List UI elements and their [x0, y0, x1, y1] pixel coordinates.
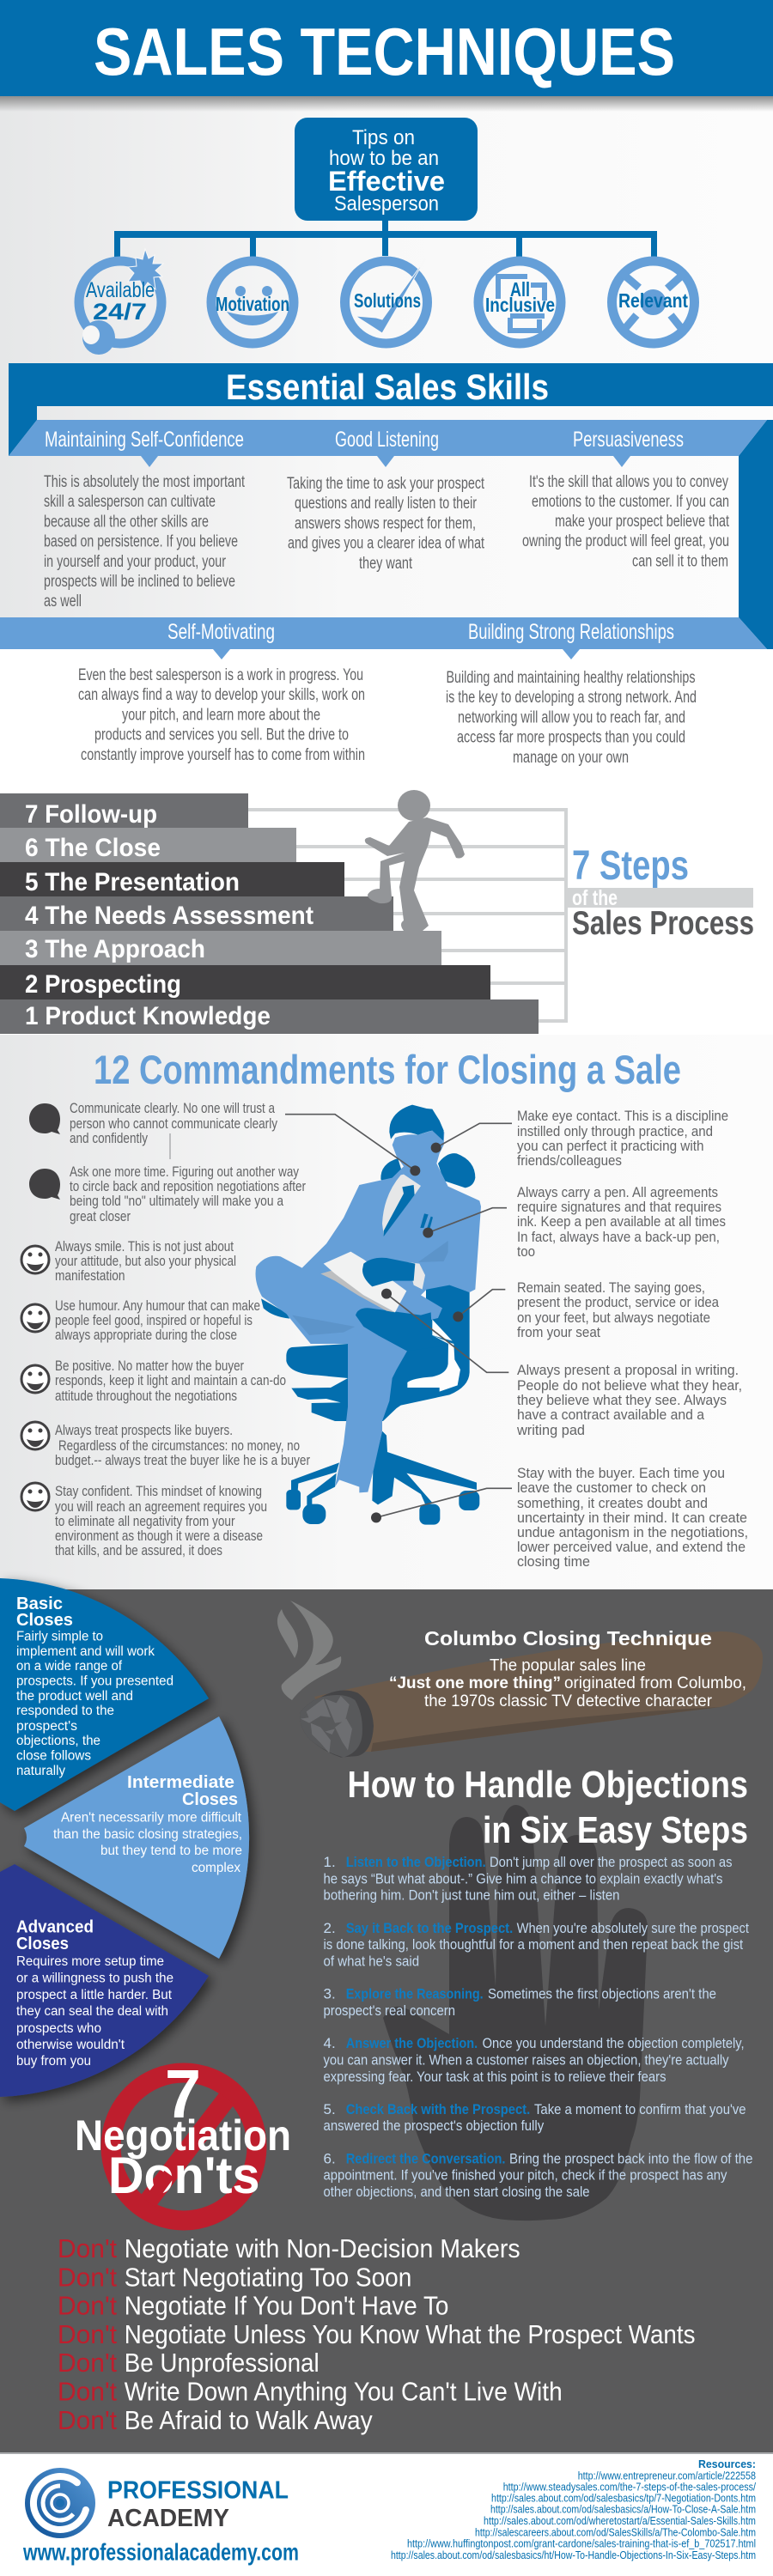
step 3: [0, 931, 441, 965]
step 2: 2.: [323, 1920, 336, 1936]
resources list: Resources:: [698, 2458, 756, 2470]
text: maintaining self-confidence: This is absolutely the most important: [44, 473, 246, 491]
icon: motivation: Motivation: [216, 293, 289, 315]
step 6: appointment. If you've finished your pitch, check if the prospect has any: [323, 2167, 727, 2184]
text: good listening: and gives you a clearer idea of what: [288, 534, 485, 553]
icon: smiley 3: [21, 1365, 49, 1393]
text: stay with the buyer: uncertainty in their mind. It can create: [517, 1510, 747, 1526]
step 1: 1.: [323, 1854, 336, 1870]
text: stay with the buyer: [517, 1466, 748, 1570]
text: communicate clearly: [70, 1101, 278, 1146]
shirt: [382, 1175, 421, 1235]
icon: relevant: Relevant: [618, 289, 688, 312]
step 4: 4.: [323, 2035, 336, 2051]
tips box: how to be an: [329, 147, 439, 170]
pie: advanced closes: Requires more setup time: [16, 1954, 164, 1969]
text: ask one more time: to circle back and reposition negotiations after: [70, 1179, 306, 1194]
text: always smile: Always smile. This is not just about: [55, 1239, 234, 1255]
text: always smile: [55, 1239, 236, 1284]
text: treat prospects like buyers: budget.-- always treat the buyer like he is a buyer: [55, 1453, 310, 1468]
callout: columbo closing technique: [389, 1627, 746, 1710]
text: be positive: [55, 1358, 286, 1404]
don't 6: Don't: [58, 2377, 118, 2406]
text: good listening: answers shows respect for them,: [295, 515, 476, 532]
text: communicate clearly: and confidently: [70, 1131, 149, 1146]
text: maintaining self-confidence: skill a salesperson can cultivate: [44, 493, 216, 511]
text: stay confident: that kills, and be assured, it does: [55, 1543, 222, 1558]
text: always carry a pen: ink. Keep a pen available at all times: [517, 1214, 726, 1230]
icon: all inclusive: [478, 261, 561, 343]
callout: columbo closing technique: originated from Columbo,: [564, 1674, 746, 1692]
callout: columbo closing technique: the 1970s classic TV detective character: [424, 1692, 713, 1710]
step 1: Don't jump all over the prospect as soon as: [490, 1854, 732, 1870]
pie: intermediate closes: Closes: [182, 1790, 238, 1809]
logo wordmark: ACADEMY: [107, 2505, 229, 2532]
step 5: answered the prospect's objection fully: [323, 2117, 545, 2134]
chair cut-out: [407, 1335, 460, 1392]
chair base: [286, 1431, 479, 1525]
pie: basic closes: Closes: [16, 1611, 73, 1630]
pie: basic closes: responded to the: [16, 1704, 114, 1718]
logo wordmark: www.professionalacademy.com: [22, 2539, 299, 2566]
skills frame and heading: [9, 363, 773, 649]
text: maintaining self-confidence: in yourself and your product, your: [44, 553, 226, 571]
icon and heading: 7 negotiation don'ts: [75, 2056, 291, 2221]
step 3: 3.: [323, 1985, 336, 2002]
don't 7: Be Afraid to Walk Away: [125, 2406, 373, 2435]
text: maintaining self-confidence: based on persistence. If you believe: [44, 532, 238, 551]
text: building strong relationships: networking will allow you to reach far, and: [458, 709, 685, 726]
step 3: 3 The Approach: [25, 935, 205, 963]
callout: columbo closing technique: “Just one more thing”: [389, 1674, 561, 1692]
step 4: expressing fear. Your task at this point is to relieve their fears: [323, 2069, 666, 2085]
skills header band row 2: [0, 617, 767, 659]
text: ask one more time: Ask one more time. Figuring out another way: [70, 1164, 300, 1180]
text: use humour: always appropriate during the close: [55, 1327, 237, 1343]
step 6: [323, 2150, 752, 2200]
text: make eye contact: friends/colleagues: [517, 1153, 622, 1169]
text: stay with the buyer: lower perceived value, and extend the: [517, 1540, 746, 1555]
pie: advanced closes: they can seal the deal with: [16, 2004, 168, 2019]
text: communicate clearly: person who cannot communicate clearly: [70, 1116, 278, 1132]
pie: basic closes: on a wide range of: [16, 1659, 123, 1674]
step 1: [323, 1854, 732, 1904]
text: stay with the buyer: undue antagonism in the negotiations,: [517, 1525, 748, 1540]
pie: intermediate closes: than the basic closing strategies,: [53, 1827, 242, 1842]
pen: [420, 1213, 433, 1228]
icon: smiley 4: [21, 1422, 49, 1449]
don't 1: Don't: [58, 2234, 118, 2263]
7 steps connector lines: [248, 808, 568, 1023]
step 6: [0, 828, 296, 862]
icon: solutions: [345, 259, 428, 343]
pie: advanced closes: prospect a little harder. But: [16, 1988, 173, 2002]
text: always smile: your attitude, but also your physical: [55, 1254, 236, 1269]
text: proposal in writing: Always present a proposal in writing.: [517, 1363, 739, 1378]
text: good listening: Taking the time to ask your prospect: [287, 475, 485, 493]
header banner with title: [0, 0, 773, 96]
pie: advanced closes: prospects who: [16, 2021, 101, 2036]
pie: basic closes: naturally: [16, 1764, 65, 1778]
text: persuasiveness: [522, 473, 730, 570]
icon: all inclusive: All: [510, 278, 530, 301]
don't 4: Don't: [58, 2320, 118, 2349]
text: maintaining self-confidence: [44, 473, 246, 611]
don't 2: Don't: [58, 2263, 118, 2292]
don't 5: Don't: [58, 2348, 118, 2378]
text: maintaining self-confidence: because all the other skills are: [44, 513, 209, 531]
skills header band row 1: Good Listening: [335, 428, 439, 452]
resources list: [391, 2458, 756, 2561]
step 5: 5 The Presentation: [25, 868, 240, 896]
callout: columbo closing technique: Columbo Closing Technique: [424, 1627, 712, 1649]
jacket shading: [418, 1241, 448, 1262]
icon: speech bubble 1: [29, 1103, 60, 1134]
text: use humour: Use humour. Any humour that can make: [55, 1298, 260, 1314]
text: be positive: Be positive. No matter how the buyer: [55, 1358, 244, 1374]
pie: basic closes: [0, 1578, 209, 1811]
icon: cigar: [300, 1631, 763, 1758]
body: [255, 1131, 481, 1492]
text: remain seated: [517, 1280, 720, 1340]
text: stay with the buyer: something, it creates doubt and: [517, 1496, 708, 1511]
text: building strong relationships: manage on your own: [513, 749, 629, 767]
pie: advanced closes: Advanced: [16, 1918, 94, 1937]
icon: stop hand: [383, 1805, 648, 2221]
text: always carry a pen: require signatures and that requires: [517, 1200, 721, 1215]
step 1: Listen to the Objection.: [346, 1854, 486, 1870]
step 1: [0, 999, 539, 1034]
pie: intermediate closes: complex: [192, 1861, 240, 1875]
step 3: Explore the Reasoning.: [346, 1985, 484, 2002]
icon: smoke: [277, 1601, 341, 1700]
icon: solutions: Solutions: [354, 289, 421, 312]
text: stay confident: Stay confident. This mindset of knowing: [55, 1484, 262, 1499]
step 4: Answer the Objection.: [346, 2035, 478, 2051]
icon: smiley 1: [21, 1246, 49, 1273]
icon: available 24/7: [79, 249, 163, 355]
tips box: Tips on: [352, 126, 415, 149]
heading: how to handle objections: [347, 1764, 748, 1851]
step 7: [0, 793, 248, 829]
text: be positive: responds, keep it light and maintain a can-do: [55, 1373, 286, 1388]
don't 5: Be Unprofessional: [125, 2348, 320, 2378]
icon: person climbing stairs: [365, 790, 465, 931]
text: remain seated: Remain seated. The saying goes,: [517, 1280, 705, 1296]
text: building strong relationships: [446, 669, 697, 767]
text: proposal in writing: have a contract available and a: [517, 1407, 705, 1423]
text: self-motivating: [78, 666, 365, 764]
skills header band row 1: Persuasiveness: [573, 428, 684, 452]
icon: available 24/7: 24/7: [93, 299, 147, 325]
pie: advanced closes: or a willingness to push the: [16, 1971, 173, 1986]
tips box: Effective: [328, 166, 445, 197]
under leg shadow: [261, 1298, 289, 1319]
icon: relevant: [612, 261, 694, 343]
step 6: Redirect the Conversation.: [346, 2150, 505, 2166]
icon and heading: 7 negotiation don'ts: 7: [165, 2056, 201, 2132]
icon and heading: 7 negotiation don'ts: Don'ts: [108, 2147, 259, 2204]
text: stay confident: [55, 1484, 267, 1558]
don't 7: Don't: [58, 2406, 118, 2435]
pie: basic closes: Fairly simple to: [16, 1629, 103, 1643]
pie: basic closes: prospects. If you presented: [16, 1674, 173, 1689]
text: stay with the buyer: leave the customer to check on: [517, 1480, 706, 1496]
headrest: [380, 1153, 475, 1188]
text: self-motivating: Even the best salesperson is a work in progress. You: [78, 666, 363, 684]
step 7: 7 Follow-up: [25, 800, 157, 829]
text: proposal in writing: writing pad: [516, 1423, 585, 1438]
text: building strong relationships: access far more prospects than you could: [457, 728, 685, 747]
icon and heading: 7 negotiation don'ts: Negotiation: [75, 2111, 291, 2160]
tips box: Salesperson: [334, 192, 439, 216]
text: make eye contact: instilled only through practice, and: [517, 1124, 713, 1139]
heading: 7 steps of the sales process: of the: [572, 886, 618, 910]
step list: six easy steps: [323, 1854, 752, 2200]
text: ask one more time: [70, 1164, 306, 1224]
don't 6: Write Down Anything You Can't Live With: [125, 2377, 563, 2406]
text: maintaining self-confidence: prospects will be inclined to believe: [44, 573, 235, 591]
knee: [356, 1308, 448, 1351]
text: be positive: attitude throughout the negotiations: [55, 1388, 237, 1404]
text: treat prospects like buyers: Regardless of the circumstances: no money, no: [58, 1438, 300, 1454]
text: make eye contact: Make eye contact. This is a discipline: [517, 1109, 728, 1124]
text: self-motivating: your pitch, and learn more about the: [122, 706, 320, 725]
text: remain seated: from your seat: [517, 1325, 600, 1340]
text: use humour: people feel good, inspired or hopeful is: [55, 1313, 253, 1328]
panel: dark background: [0, 1589, 773, 2453]
list: negotiation don'ts: [58, 2234, 696, 2435]
step 1: 1 Product Knowledge: [25, 1002, 271, 1030]
text: good listening: questions and really listen to their: [295, 495, 478, 513]
text: remain seated: present the product, service or idea: [517, 1295, 720, 1310]
step 4: [323, 2035, 745, 2085]
step 4: [0, 896, 393, 931]
leader lines: [285, 1115, 512, 1517]
step 5: Check Back with the Prospect.: [346, 2101, 530, 2117]
hand: [362, 1258, 415, 1286]
text: maintaining self-confidence: as well: [44, 592, 82, 611]
text: proposal in writing: they believe what they see. Always: [517, 1393, 727, 1408]
text: always carry a pen: In fact, always have a back-up pen,: [517, 1230, 720, 1245]
logo wordmark: PROFESSIONAL: [107, 2476, 289, 2504]
hair: [389, 1105, 444, 1140]
chair back and seat: [286, 1285, 470, 1421]
text: proposal in writing: [516, 1363, 742, 1438]
step 2: 2 Prospecting: [25, 970, 181, 999]
text: building strong relationships: Building and maintaining healthy relationships: [447, 669, 696, 687]
skills header band row 1: Maintaining Self-Confidence: [45, 428, 244, 452]
text: self-motivating: can always find a way to develop your skills, work on: [78, 686, 365, 704]
text: stay confident: environment as though it were a disease: [55, 1528, 263, 1544]
don't 4: Negotiate Unless You Know What the Prospect Wants: [125, 2320, 695, 2349]
tips box: [295, 118, 478, 221]
text: remain seated: on your feet, but always negotiate: [517, 1310, 710, 1326]
pie: basic closes: Basic: [16, 1595, 63, 1613]
step 2: Say it Back to the Prospect.: [346, 1920, 513, 1936]
text: stay confident: to eliminate all negativity from your: [55, 1514, 235, 1529]
text: good listening: they want: [359, 555, 413, 573]
text: stay confident: you will reach an agreement requires you: [55, 1499, 267, 1515]
7 steps staircase: [0, 793, 539, 1034]
pie: intermediate closes: Intermediate: [127, 1773, 234, 1792]
pie: advanced closes: buy from you: [16, 2054, 91, 2069]
text: always smile: manifestation: [55, 1268, 125, 1284]
cigar ash: [300, 1690, 374, 1758]
illustration: seated businessman on chair: [255, 1105, 512, 1525]
step 6: other objections, and then start closing the sale: [323, 2184, 589, 2200]
icon: all inclusive: Inclusive: [485, 294, 555, 316]
pie: intermediate closes: [24, 1716, 249, 1959]
text: always carry a pen: [517, 1185, 726, 1260]
step 3: prospect's real concern: [323, 2002, 455, 2019]
don't 2: Start Negotiating Too Soon: [125, 2263, 411, 2292]
pie: basic closes: objections, the: [16, 1734, 100, 1748]
footer panel: [0, 2452, 773, 2576]
book: [320, 1270, 395, 1312]
pie: intermediate closes: but they tend to be more: [100, 1844, 242, 1858]
don't 3: Negotiate If You Don't Have To: [125, 2292, 448, 2321]
skills header band row 2: Building Strong Relationships: [468, 620, 674, 644]
text: communicate clearly: Communicate clearly. No one will trust a: [70, 1101, 276, 1116]
tips connector tree: [114, 221, 657, 257]
step 3: Sometimes the first objections aren't the: [488, 1985, 716, 2002]
text: persuasiveness: can sell it to them: [632, 553, 728, 570]
text: good listening: [287, 475, 485, 573]
text: stay with the buyer: Stay with the buyer. Each time you: [517, 1466, 725, 1481]
text: proposal in writing: People do not believe what they hear,: [517, 1378, 742, 1394]
step 4: 4 The Needs Assessment: [25, 902, 313, 930]
heading: 7 steps of the sales process: 7 Steps: [572, 843, 689, 889]
pie: basic closes: the product well and: [16, 1689, 133, 1704]
pie: advanced closes: [0, 1864, 209, 2097]
text: treat prospects like buyers: Always treat prospects like buyers.: [55, 1423, 233, 1438]
icon: smiley 2: [21, 1304, 49, 1332]
cuff: [408, 1262, 425, 1290]
pie: advanced closes: otherwise wouldn't: [16, 2038, 125, 2052]
step 6: 6 The Close: [25, 834, 161, 862]
don't 1: Negotiate with Non-Decision Makers: [125, 2234, 520, 2263]
step 5: 5.: [323, 2101, 336, 2117]
step 3: [323, 1985, 716, 2019]
tie: [384, 1185, 415, 1236]
callout: columbo closing technique: The popular sales line: [490, 1657, 646, 1674]
skills header band row 1: [9, 420, 767, 467]
step 5: Take a moment to confirm that you've: [534, 2101, 746, 2117]
pie: intermediate closes: Aren't necessarily more difficult: [61, 1810, 242, 1826]
text: treat prospects like buyers: [55, 1423, 310, 1468]
step 5: [0, 862, 344, 896]
icon: available 24/7: Available: [86, 278, 155, 302]
pie: basic closes: close follows: [16, 1749, 91, 1764]
text: self-motivating: products and services you sell. But the drive to: [94, 726, 349, 744]
icon: motivation: [211, 261, 294, 343]
heading: 7 steps of the sales process: [567, 843, 754, 942]
logo wordmark: [22, 2476, 299, 2566]
skills header band row 2: Self-Motivating: [167, 620, 275, 644]
text: always carry a pen: too: [517, 1244, 535, 1260]
icon: smiley 5: [21, 1483, 49, 1510]
don't 3: Don't: [58, 2292, 118, 2321]
text: make eye contact: [517, 1109, 728, 1169]
don't 5: [58, 2348, 320, 2378]
text: ask one more time: great closer: [70, 1209, 131, 1224]
text: ask one more time: being told "no" ultimately will make you a: [70, 1194, 284, 1209]
pie: basic closes: prospect's: [16, 1719, 77, 1734]
text: make eye contact: you can perfect it practicing with: [517, 1139, 704, 1154]
step 2: [323, 1920, 749, 1969]
text: stay with the buyer: closing time: [517, 1554, 590, 1570]
title: SALES TECHNIQUES: [94, 14, 675, 89]
text: self-motivating: constantly improve yourself has to come from within: [81, 746, 365, 764]
heading: essential sales skills: Essential Sales Skills: [226, 367, 549, 407]
text: always carry a pen: Always carry a pen. All agreements: [517, 1185, 718, 1200]
step 2: [0, 965, 490, 999]
text: building strong relationships: is the key to developing a strong network. And: [446, 689, 697, 707]
step 2: of what he's said: [323, 1953, 419, 1969]
pie: advanced closes: Closes: [16, 1935, 69, 1953]
pie: basic closes: implement and will work: [16, 1644, 155, 1659]
text: use humour: [55, 1298, 260, 1343]
leader dots: [371, 1143, 463, 1522]
step 1: bothering him. Don't just tune him out, either – listen: [323, 1887, 620, 1904]
icon: speech bubble 2: [29, 1169, 60, 1200]
step 1: he says “But what about-.” Give him a chance to explain exactly what's: [323, 1870, 723, 1886]
step 6: 6.: [323, 2150, 336, 2166]
logo mark: [25, 2468, 95, 2538]
step 5: [323, 2101, 746, 2134]
